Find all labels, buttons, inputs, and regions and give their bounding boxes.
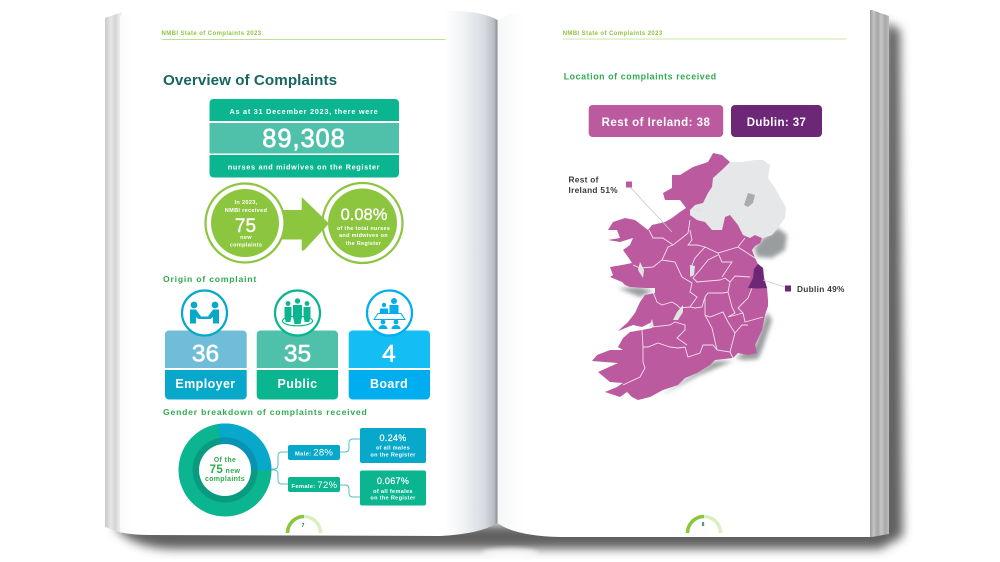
page number 8: 8 — [702, 522, 705, 528]
heading: origin of complaint: Origin of complaint — [163, 274, 257, 284]
running header: NMBI State of Complaints 2023 — [162, 31, 262, 37]
callout: females: on the Register — [370, 496, 416, 502]
label: male: Male: 28% — [295, 448, 333, 458]
callout: males: on the Register — [370, 452, 416, 458]
running header: NMBI State of Complaints 2023 — [563, 31, 663, 37]
page title: Overview of Complaints — [163, 72, 337, 89]
circle: share of register: and midwives on — [339, 233, 388, 239]
map shadow — [618, 228, 787, 396]
leader: rest of Ireland: Ireland 51% — [568, 185, 618, 195]
Lough Neagh — [744, 193, 755, 207]
label: female — [288, 477, 340, 492]
right page stack — [868, 10, 889, 537]
icon: board meeting — [367, 290, 412, 336]
label: male — [288, 445, 340, 460]
page number 7 — [286, 514, 322, 533]
label: female: Female: 72% — [292, 480, 338, 491]
button: rest of Ireland: Rest of Ireland: 38 — [602, 117, 711, 129]
card: employer — [165, 290, 247, 400]
callout: females: of all females — [373, 489, 413, 495]
register count panel — [210, 99, 399, 178]
icon: group of people — [275, 290, 320, 336]
connector lines — [271, 439, 360, 497]
circle: new complaints: complaints — [230, 242, 262, 248]
leader: rest of Ireland: Rest of — [568, 174, 599, 184]
button: Dublin: Dublin: 37 — [747, 117, 806, 129]
register count panel: As at 31 December 2023, there were — [230, 107, 378, 116]
circle: share of register: 0.08% — [341, 206, 388, 224]
circle: new complaints: In 2023, — [235, 200, 258, 206]
leader: rest of Ireland — [568, 174, 672, 232]
arrow — [280, 197, 329, 250]
circle: new complaints: 75 — [235, 216, 256, 237]
heading: gender breakdown: Gender breakdown of complaints received — [163, 407, 368, 417]
card: public — [257, 290, 338, 400]
callout: males: of all males — [376, 446, 410, 452]
leader: Dublin — [763, 280, 845, 294]
callout: males: 0.24% — [379, 433, 407, 443]
circle: share of register: of the total nurses — [337, 226, 390, 232]
book shadow — [113, 22, 903, 558]
circle: new complaints: NMBI received — [225, 208, 268, 214]
register count panel: nurses and midwives on the Register — [228, 162, 380, 172]
button: rest of Ireland — [589, 105, 723, 137]
callout: males — [360, 428, 426, 463]
loughs — [638, 208, 702, 327]
button: Dublin — [731, 105, 822, 137]
icon: handshake — [182, 290, 227, 336]
heading: location: Location of complaints received — [564, 72, 717, 82]
card: employer: Employer — [175, 377, 236, 391]
circle: new complaints — [206, 184, 284, 262]
donut chart: complaints — [205, 476, 245, 483]
callout: females: 0.067% — [377, 476, 409, 486]
left page stack — [105, 12, 122, 533]
donut chart: Of the — [214, 457, 236, 464]
card: public: 35 — [284, 341, 311, 368]
card: employer: 36 — [192, 341, 219, 368]
left page — [120, 11, 498, 550]
Republic of Ireland — [592, 153, 768, 400]
card: board: 4 — [382, 341, 396, 368]
circle: new complaints: new — [240, 235, 252, 241]
page number 8 — [686, 514, 722, 533]
card: board: Board — [370, 377, 408, 391]
right page — [498, 10, 870, 550]
donut chart — [178, 423, 272, 516]
page number 7: 7 — [302, 523, 305, 529]
circle: share of register — [322, 183, 402, 263]
leader: Dublin: Dublin 49% — [797, 284, 845, 294]
callout: females — [360, 470, 426, 506]
circle: share of register: the Register — [346, 241, 382, 247]
card: public: Public — [278, 377, 317, 391]
Northern Ireland — [690, 160, 786, 238]
card: board — [349, 290, 430, 400]
county boundaries — [623, 220, 763, 385]
Dublin county — [748, 264, 767, 288]
register count panel: 89,308 — [262, 125, 346, 153]
donut chart: 75 new — [210, 464, 241, 476]
map of Ireland — [592, 153, 787, 400]
